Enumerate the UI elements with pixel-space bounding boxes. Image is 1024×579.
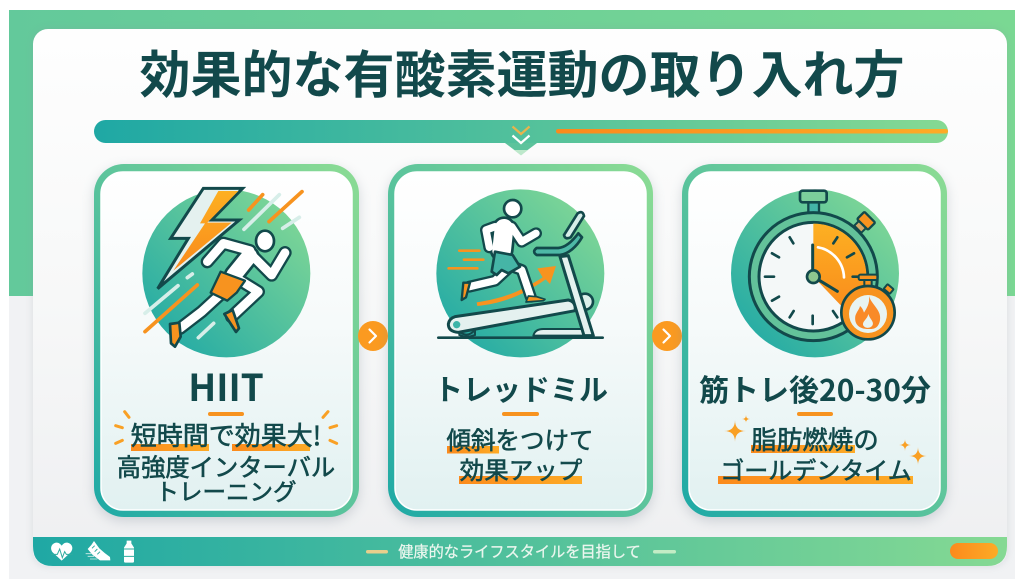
body text (446, 422, 594, 487)
text highlights (131, 444, 310, 451)
panel: post-workout timing card (682, 164, 947, 521)
body text: 短時間で効果大! (131, 416, 321, 453)
footer accent left (366, 550, 388, 554)
body text: 高強度インターバル (117, 448, 335, 483)
icon: sprinter with lightning bolt (142, 188, 310, 357)
body text: トレーニング (156, 473, 296, 507)
accent rule (797, 412, 833, 416)
arrow: card 1 to 2 (358, 321, 388, 351)
accent rule (208, 412, 244, 416)
sparkles (724, 415, 927, 465)
arrow: card 2 to 3 (652, 321, 682, 351)
card title: timing: 筋トレ後20-30分 (699, 366, 931, 410)
body text (720, 420, 912, 486)
icon: stopwatch with flame (731, 189, 899, 357)
body text: 効果アップ (460, 452, 583, 487)
body text: 傾斜をつけて (446, 422, 594, 457)
text highlights (718, 445, 913, 484)
card title: HIIT: HIIT (188, 358, 264, 412)
footer accent right (653, 550, 676, 554)
body text (117, 416, 335, 507)
footer orange pill (950, 543, 998, 559)
title: 効果的な有酸素運動の取り入れ方 (139, 34, 905, 108)
icon: heart rate (51, 543, 73, 561)
panel: HIIT card (94, 164, 359, 521)
icon: treadmill runner (436, 189, 604, 357)
icon: water bottle (124, 541, 134, 563)
icon: running shoe (86, 541, 110, 560)
footer bar (33, 537, 1007, 566)
body text: 脂肪燃焼の (751, 420, 879, 457)
card title: treadmill: トレッドミル (434, 367, 608, 409)
panel: treadmill card (388, 164, 653, 521)
text highlights (447, 446, 582, 484)
footer caption: 健康的なライフスタイルを目指して (398, 540, 641, 562)
title divider bar (94, 120, 948, 156)
accent rule (502, 412, 539, 416)
emphasis rays (116, 412, 337, 443)
body text: ゴールデンタイム (720, 451, 912, 486)
